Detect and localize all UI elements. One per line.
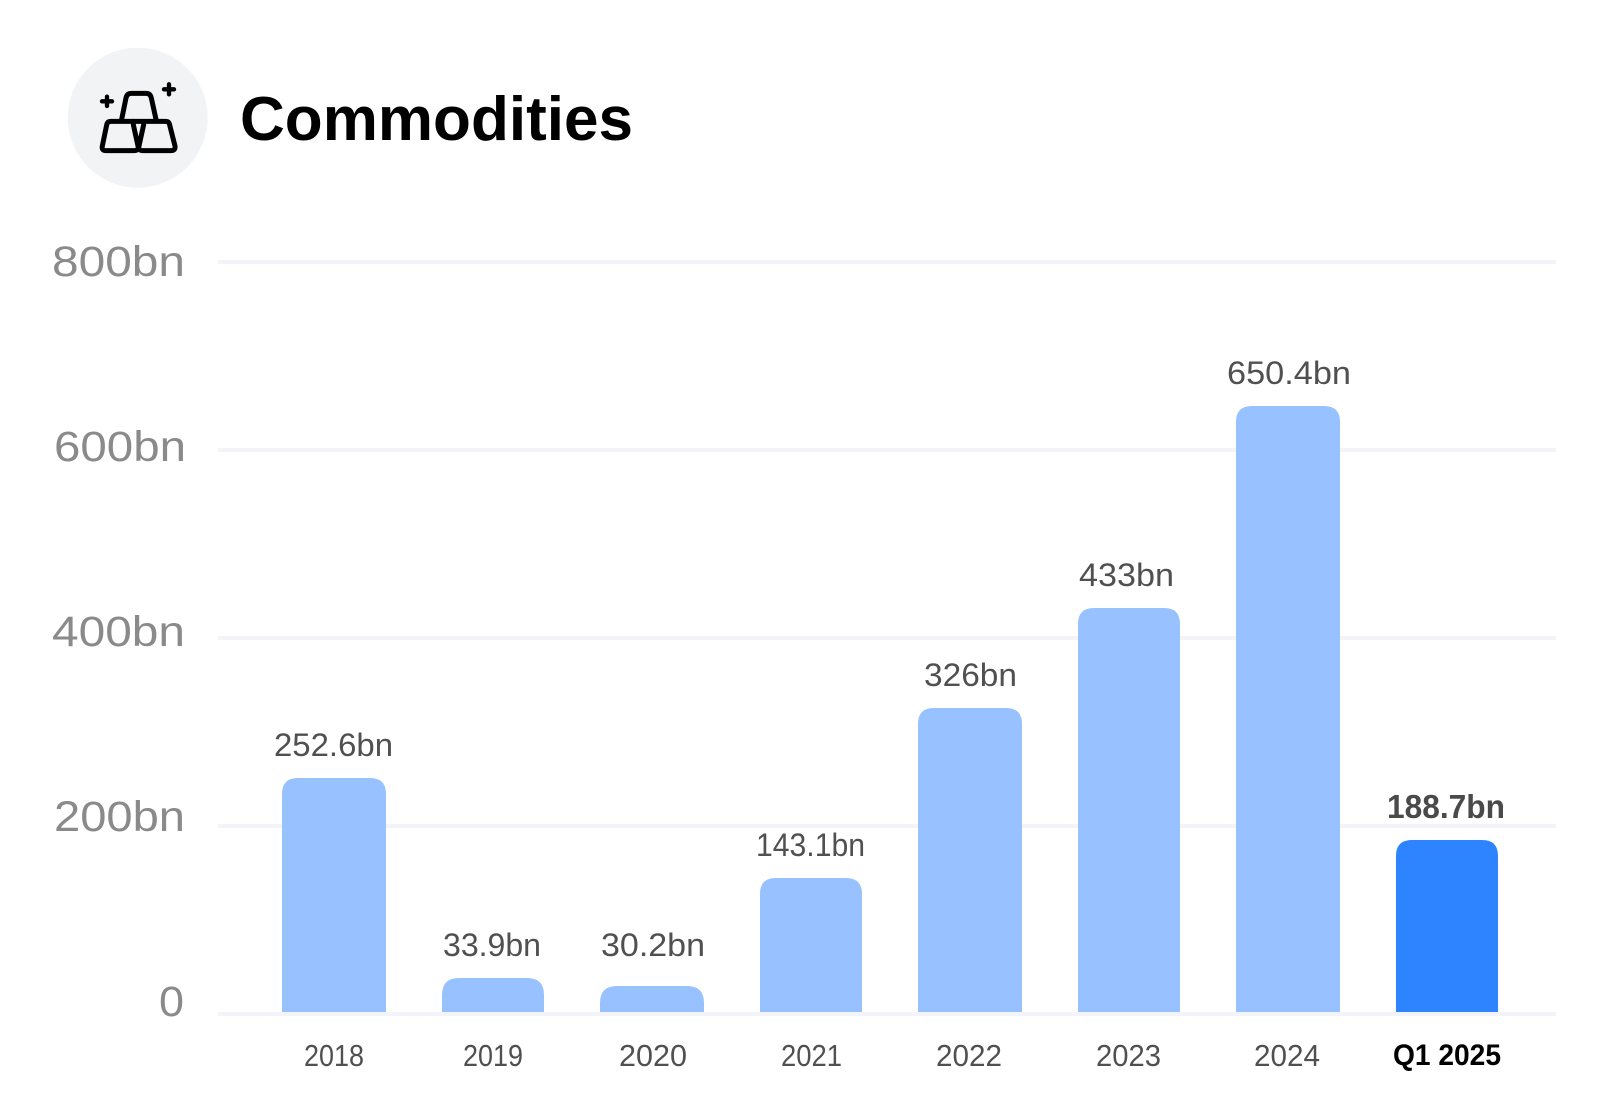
bar: 2024 bbox=[1236, 406, 1340, 1012]
x-axis labels: 2024 bbox=[1254, 1038, 1320, 1073]
gridlines bbox=[218, 260, 1556, 1016]
bar: 2020 bbox=[600, 986, 704, 1012]
x-axis labels: 2019 bbox=[463, 1038, 523, 1073]
y-axis labels bbox=[52, 238, 186, 1026]
x-axis labels: Q1 2025 bbox=[1393, 1039, 1501, 1072]
value labels: 30.2bn bbox=[601, 927, 705, 963]
x-axis labels bbox=[304, 1038, 1501, 1073]
bar: Q1 2025 bbox=[1396, 840, 1498, 1012]
title: Commodities bbox=[240, 85, 633, 154]
y-axis labels: 200bn bbox=[54, 793, 185, 841]
y-axis labels: 600bn bbox=[54, 423, 186, 471]
value labels: 33.9bn bbox=[443, 927, 541, 963]
x-axis labels: 2021 bbox=[781, 1038, 842, 1073]
bar: 2023 bbox=[1078, 608, 1180, 1012]
value labels bbox=[274, 355, 1505, 963]
value labels: 143.1bn bbox=[756, 827, 865, 863]
value labels: 326bn bbox=[924, 657, 1017, 693]
y-axis labels: 400bn bbox=[52, 608, 185, 656]
x-axis labels: 2022 bbox=[936, 1038, 1002, 1073]
bars bbox=[282, 406, 1498, 1012]
x-axis labels: 2018 bbox=[304, 1038, 364, 1073]
x-axis labels: 2023 bbox=[1096, 1038, 1161, 1073]
y-axis labels: 800bn bbox=[52, 238, 185, 286]
value labels: 650.4bn bbox=[1227, 355, 1351, 391]
header icon: gold bars bbox=[68, 48, 208, 188]
value labels: 188.7bn bbox=[1387, 788, 1505, 825]
bar: 2019 bbox=[442, 978, 544, 1012]
bar: 2022 bbox=[918, 708, 1022, 1012]
value labels: 252.6bn bbox=[274, 727, 393, 763]
y-axis labels: 0 bbox=[159, 978, 184, 1026]
bar: 2021 bbox=[760, 878, 862, 1012]
value labels: 433bn bbox=[1079, 557, 1174, 593]
x-axis labels: 2020 bbox=[619, 1038, 687, 1073]
bar: 2018 bbox=[282, 778, 386, 1012]
